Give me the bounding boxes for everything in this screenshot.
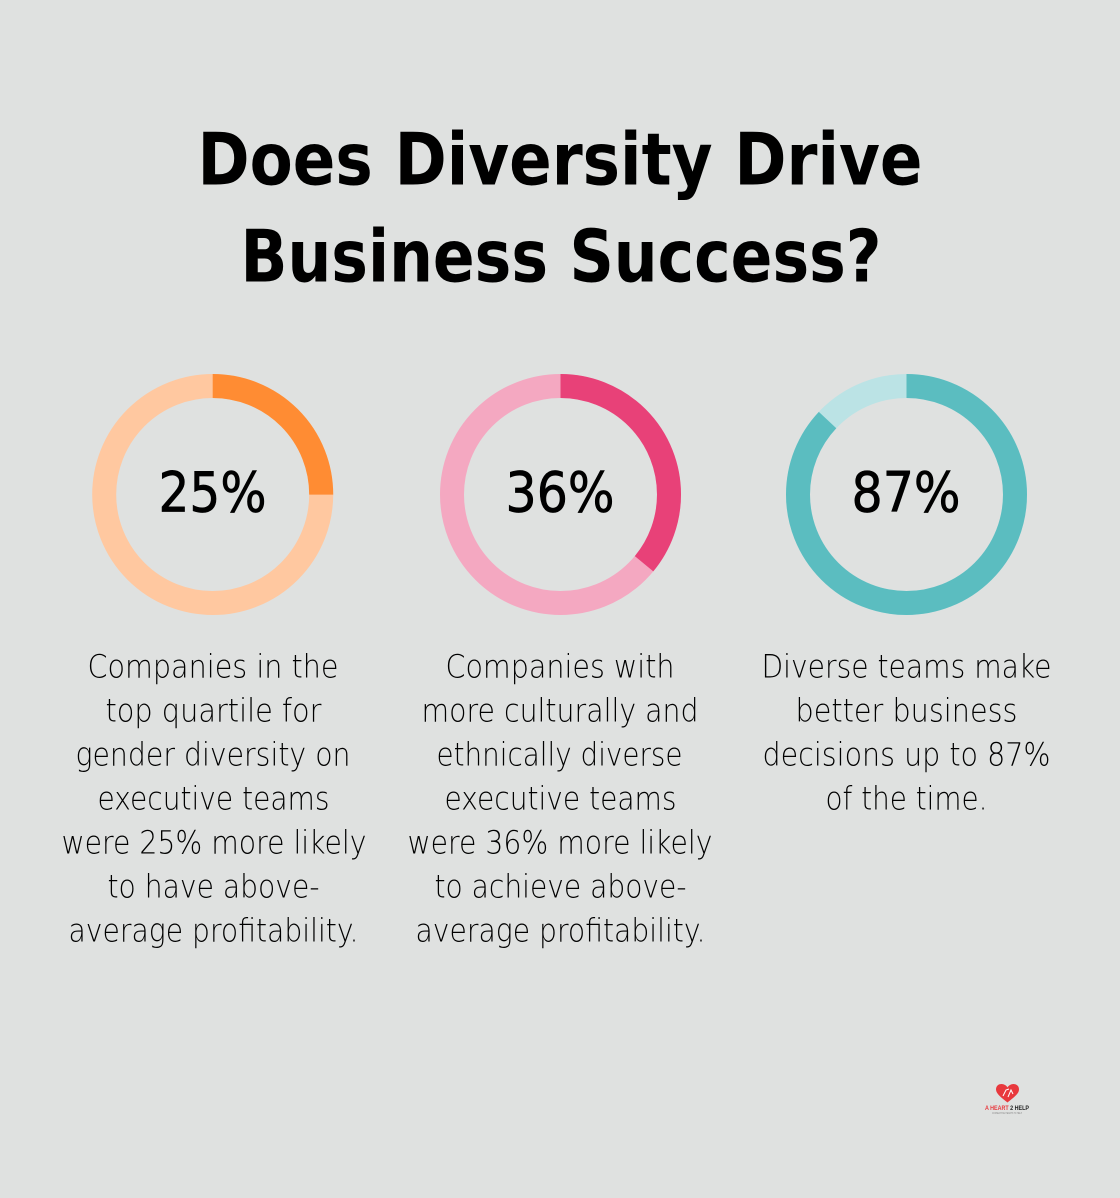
description: gender diversity: Companies in the <box>88 648 338 686</box>
logo tagline: CONNECTING HEARTS TO HELP <box>992 1112 1022 1115</box>
donut chart: 36% <box>452 386 669 603</box>
description: business decisions: better business <box>796 692 1018 730</box>
description: gender diversity: average profitability. <box>68 912 358 950</box>
donut chart: 87% <box>798 386 1015 603</box>
panel: gender diversity 25% <box>62 386 366 950</box>
description: cultural diversity: ethnically diverse <box>436 736 682 774</box>
logo wordmark: A HEART 2 HELP <box>985 1105 1030 1112</box>
logo: A Heart 2 Help <box>985 1084 1030 1115</box>
description: cultural diversity <box>408 648 712 950</box>
description: business decisions <box>762 648 1052 818</box>
description: cultural diversity: executive teams <box>444 780 676 818</box>
description: cultural diversity: to achieve above- <box>434 868 686 906</box>
description: gender diversity: were 25% more likely <box>62 824 366 862</box>
donut chart: 25% <box>104 386 321 603</box>
description: cultural diversity: Companies with <box>446 648 674 686</box>
description: gender diversity <box>62 648 366 950</box>
description: gender diversity: to have above- <box>108 868 320 906</box>
description: gender diversity: gender diversity on <box>76 736 350 774</box>
panel: business decisions 87% <box>762 386 1052 818</box>
panel: cultural diversity 36% <box>408 386 712 950</box>
description: business decisions: of the time. <box>826 780 988 818</box>
description: cultural diversity: were 36% more likely <box>408 824 712 862</box>
description: gender diversity: top quartile for <box>106 692 322 730</box>
description: cultural diversity: more culturally and <box>422 692 698 730</box>
value: 25%: 25% <box>158 460 266 524</box>
value: 36%: 36% <box>506 460 614 524</box>
description: gender diversity: executive teams <box>98 780 330 818</box>
title <box>198 118 922 298</box>
value: 87%: 87% <box>852 460 960 524</box>
description: business decisions: decisions up to 87% <box>762 736 1050 774</box>
icon: heart with hands <box>996 1084 1019 1102</box>
title: Business Success? <box>240 214 882 298</box>
description: business decisions: Diverse teams make <box>762 648 1052 686</box>
title: Does Diversity Drive <box>198 118 922 202</box>
description: cultural diversity: average profitability. <box>416 912 706 950</box>
